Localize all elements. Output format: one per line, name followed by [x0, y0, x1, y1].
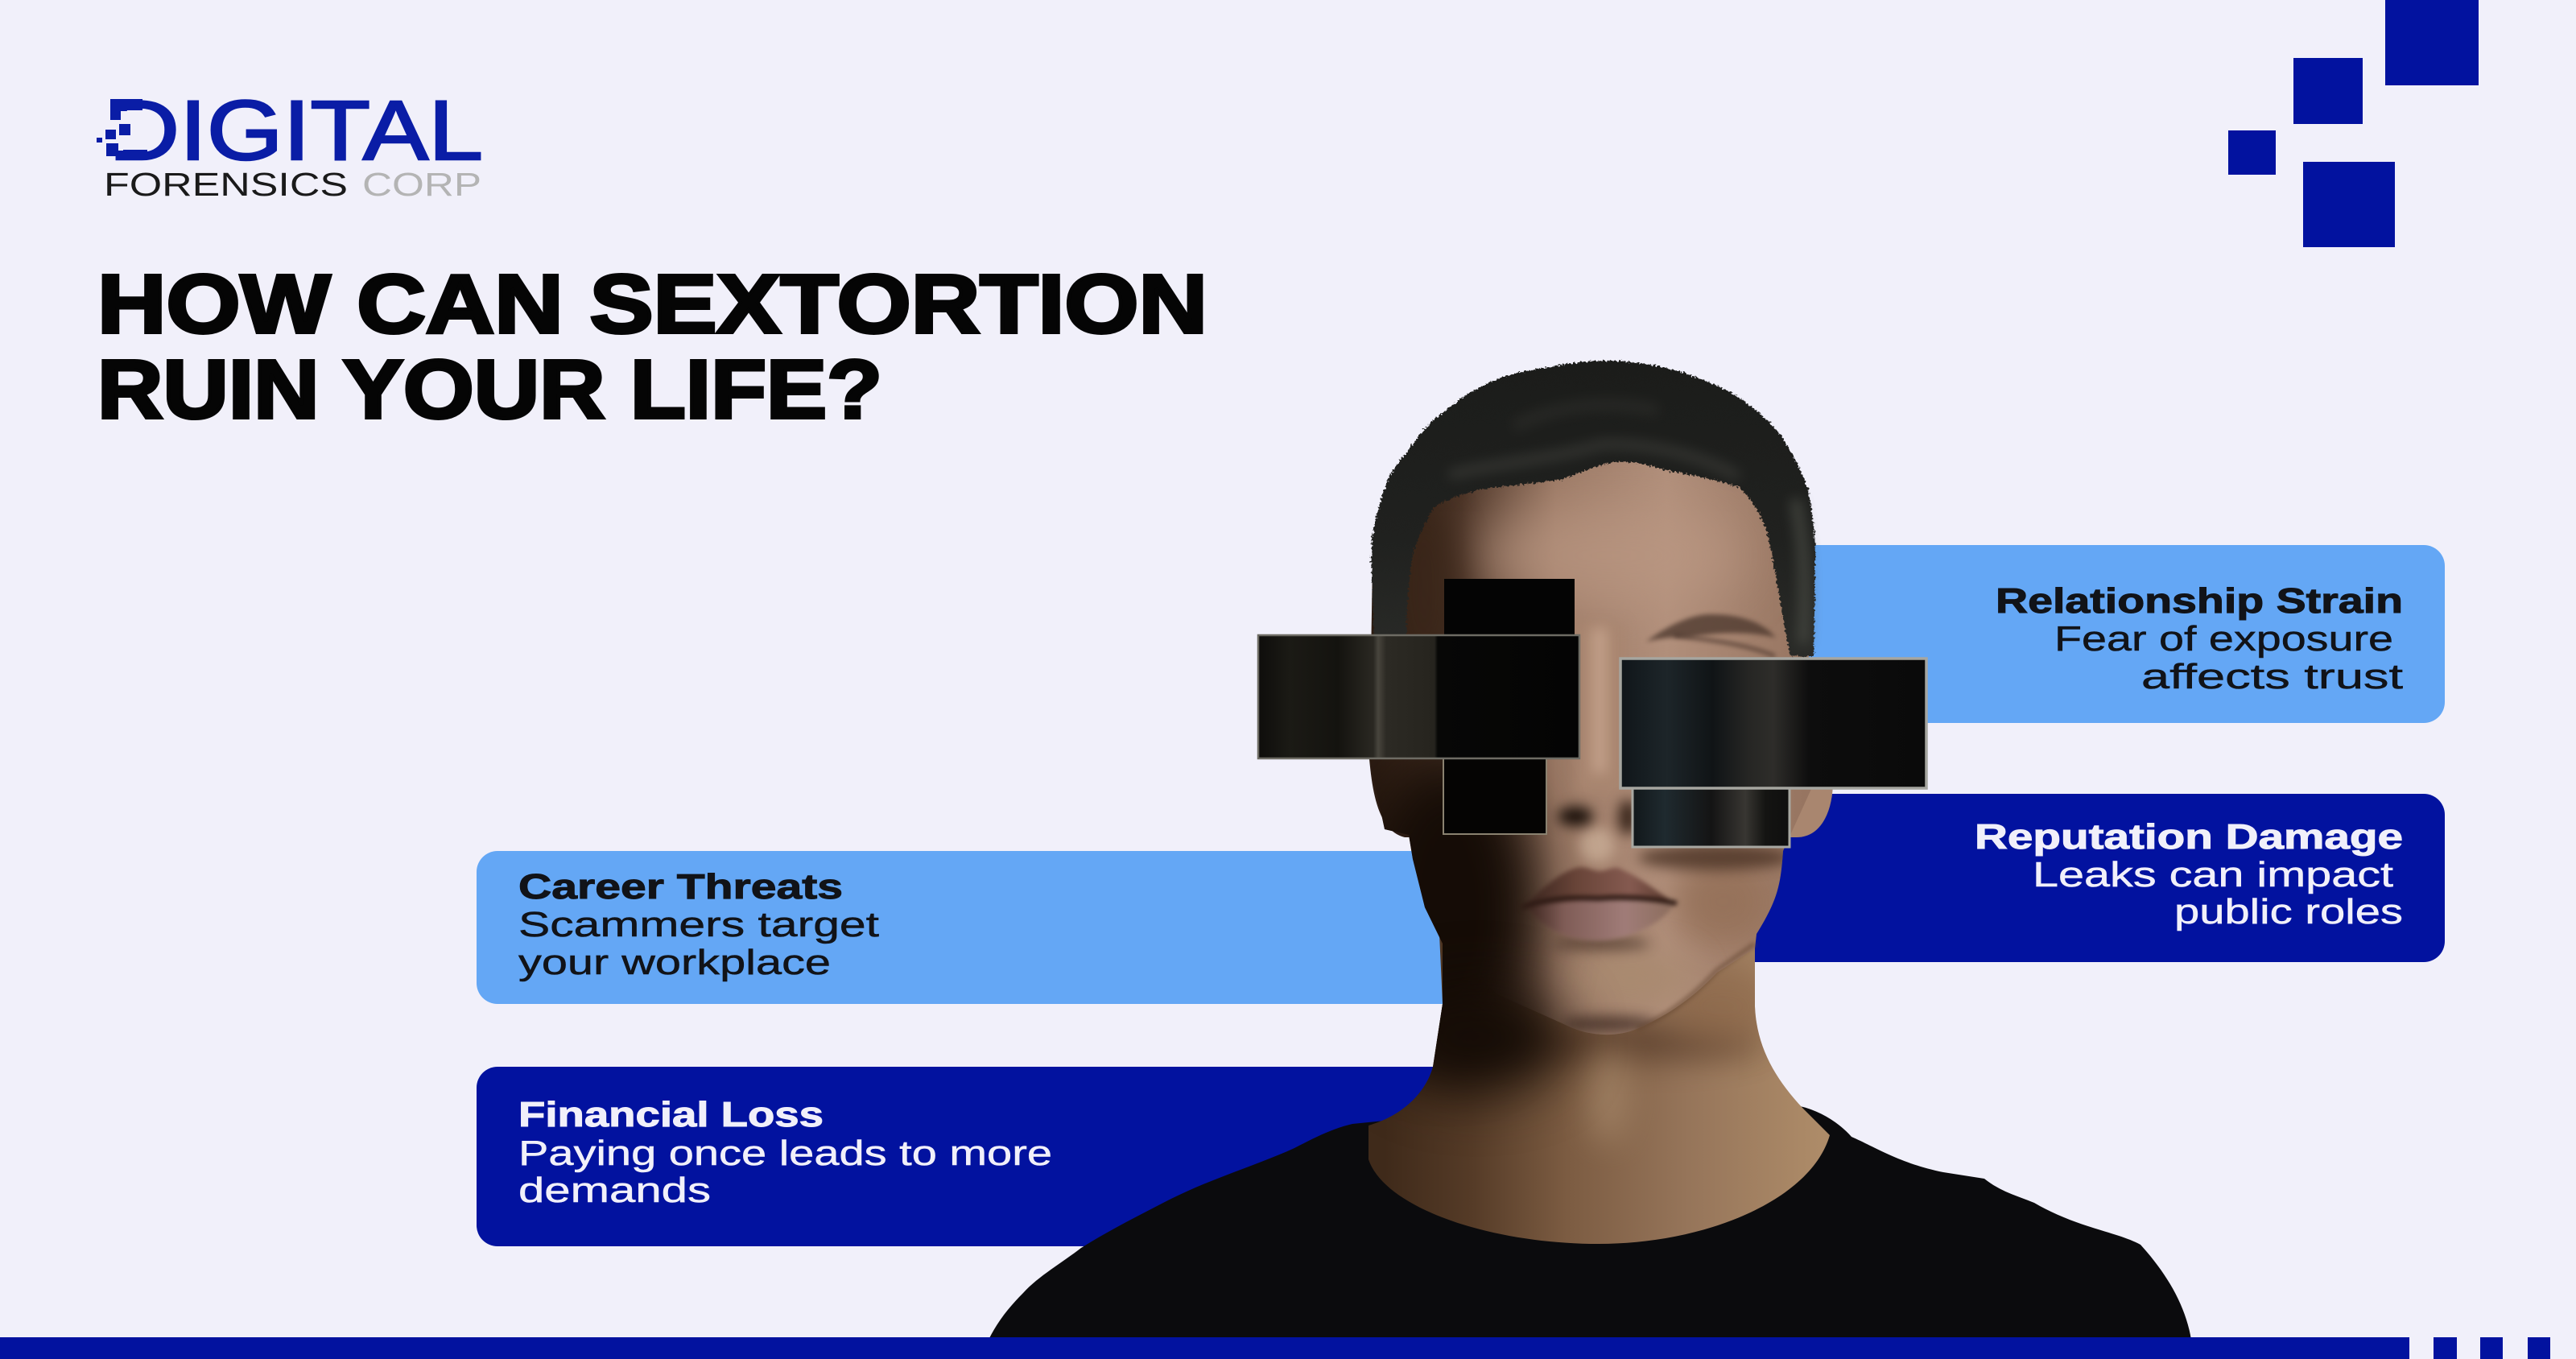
mirror block: lower right [1633, 785, 1790, 847]
mirror block: top narrow [1444, 579, 1575, 635]
ear: left [1368, 749, 1429, 837]
panel: financial loss: Financial Loss [518, 1095, 824, 1134]
mirror block: large right [1620, 659, 1926, 788]
mirror block: bottom narrow [1443, 757, 1546, 834]
nose [1576, 624, 1637, 863]
panel: reputation damage: Leaks can impact [2033, 855, 2393, 894]
mirror block: large left [1258, 635, 1579, 758]
title [97, 258, 1208, 436]
jaw line [1637, 944, 1755, 1029]
panel: reputation damage [1690, 794, 2445, 962]
panel: career threats: Scammers target [518, 905, 879, 944]
logo: Digital Forensics Corp: DIGITAL [109, 84, 483, 178]
portrait: person with mirrored blocks over the eyes [989, 361, 2191, 1340]
logo: Digital Forensics Corp: CORP [362, 166, 481, 203]
panel: career threats [477, 851, 1483, 1004]
panel: financial loss: Paying once leads to more [518, 1134, 1052, 1173]
decorative squares top right [2228, 0, 2479, 247]
bottom bar and dots [0, 1337, 2550, 1359]
ear: right [1779, 773, 1833, 837]
title: RUIN YOUR LIFE? [97, 343, 882, 436]
shirt [989, 1106, 2191, 1340]
hair [1371, 361, 1815, 656]
logo: Digital Forensics Corp: FORENSICS [104, 166, 348, 203]
panel: relationship strain: Relationship Strain [1996, 581, 2403, 621]
eyebrow and closed eye [1646, 614, 1776, 656]
panel: financial loss [477, 1067, 1483, 1246]
face [1369, 461, 1811, 1035]
panel: relationship strain: Fear of exposure [2054, 619, 2393, 659]
panel: financial loss: demands [518, 1171, 711, 1210]
panel: relationship strain: affects trust [2141, 657, 2403, 696]
neck [1368, 937, 1830, 1244]
mouth [1521, 867, 1677, 940]
panel: relationship strain [1690, 545, 2445, 723]
panel: reputation damage: Reputation Damage [1975, 817, 2403, 857]
panel: career threats: Career Threats [518, 867, 843, 907]
logo: Digital Forensics Corp [97, 84, 483, 203]
panel: career threats: your workplace [518, 943, 831, 982]
shadow across lower-left of face and neck [1360, 757, 1593, 1091]
panel: reputation damage: public roles [2174, 892, 2403, 931]
title: HOW CAN SEXTORTION [97, 258, 1208, 350]
